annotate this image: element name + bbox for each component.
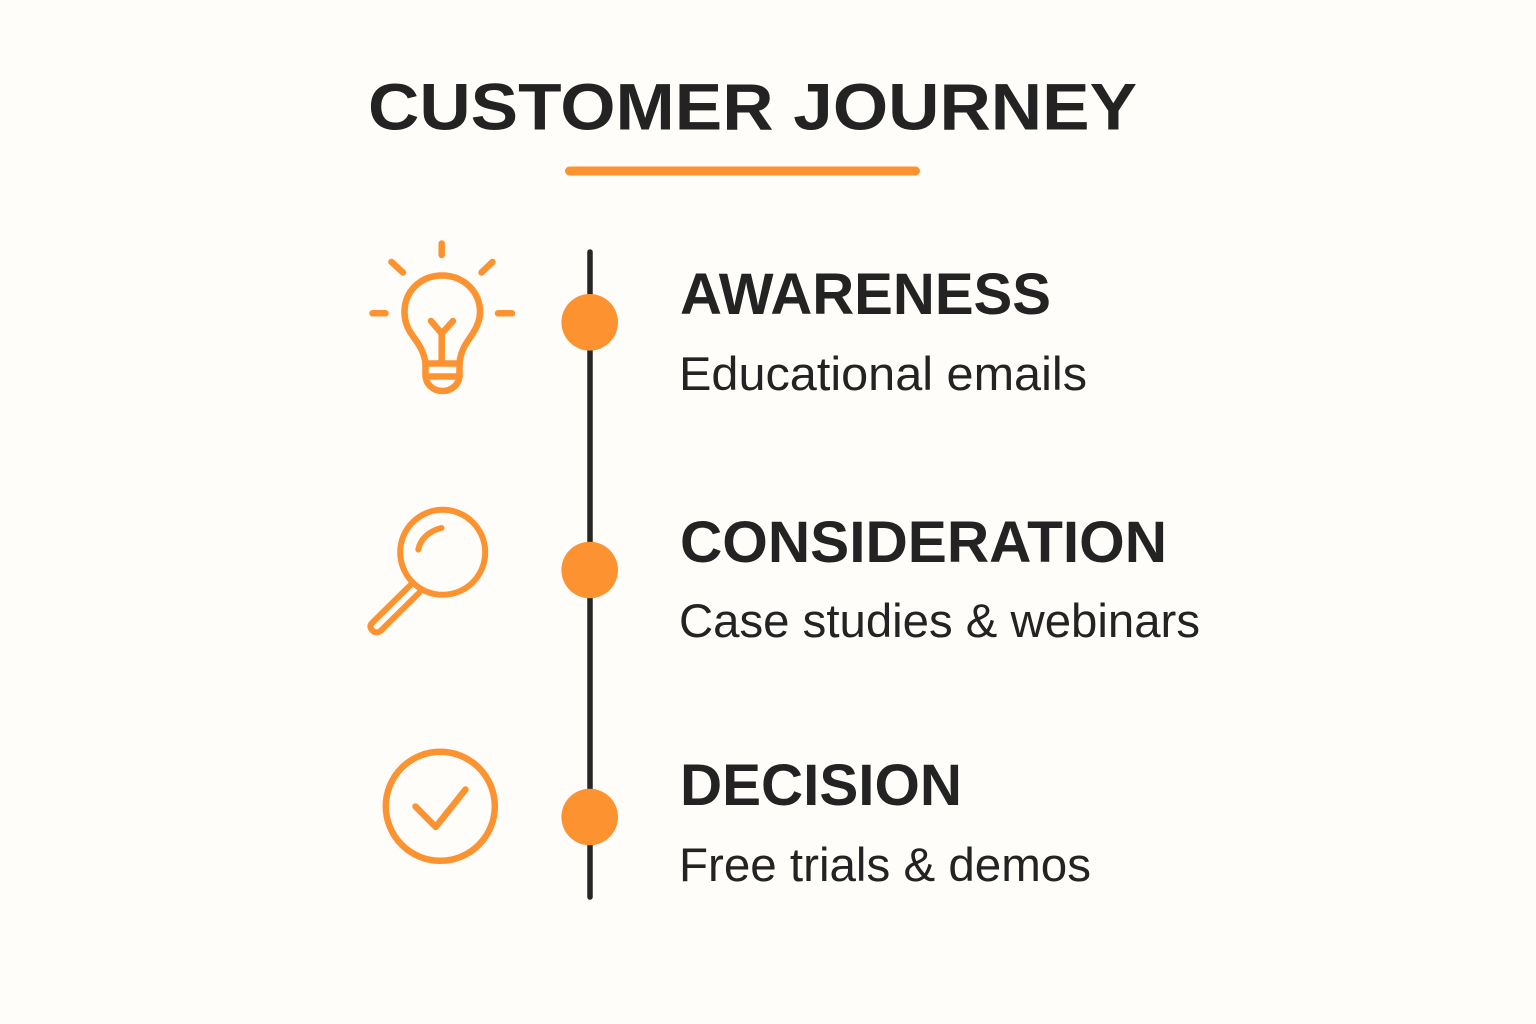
timeline dot: awareness — [561, 294, 618, 351]
icon: light bulb — [372, 244, 512, 391]
title: CUSTOMER JOURNEY — [368, 70, 1137, 144]
icon: check circle — [386, 752, 495, 861]
timeline dot: decision — [561, 789, 618, 845]
stage: decision — [386, 752, 1091, 891]
timeline dot: consideration — [561, 542, 618, 598]
icon: magnifying glass — [370, 510, 485, 632]
title underline — [565, 166, 920, 176]
text: awareness detail: Educational emails — [679, 347, 1087, 400]
stage: awareness — [372, 244, 1087, 400]
stage: consideration — [370, 510, 1200, 647]
timeline line — [587, 252, 593, 897]
heading: consideration: CONSIDERATION — [680, 510, 1167, 575]
heading: decision: DECISION — [680, 753, 962, 818]
text: decision detail: Free trials & demos — [679, 838, 1091, 891]
heading: awareness: AWARENESS — [680, 262, 1051, 327]
text: consideration detail: Case studies & webinars — [679, 594, 1200, 647]
